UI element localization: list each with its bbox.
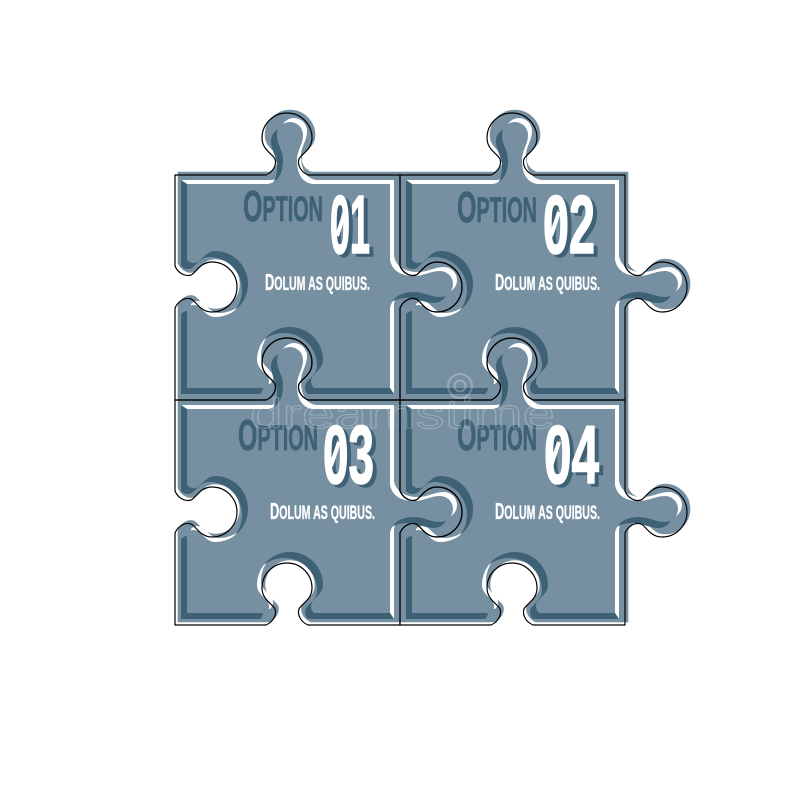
number 04: 04	[544, 408, 599, 501]
watermark word: dreamstime	[250, 390, 555, 437]
text: 01	[334, 181, 374, 274]
option 01 text	[243, 178, 374, 295]
puzzle base fill	[178, 110, 690, 622]
number 04 shadow: 04	[548, 411, 603, 504]
option 04 description: DOLUM AS QUIBUS.	[495, 498, 600, 524]
number 02: 02	[543, 178, 595, 271]
puzzle piece 04 bevel	[406, 343, 682, 619]
number 03: 03	[323, 408, 374, 501]
option 02 description: DOLUM AS QUIBUS.	[495, 269, 600, 295]
black piece outlines	[175, 113, 687, 625]
option 04 text	[457, 408, 603, 524]
watermark spiral	[448, 374, 472, 398]
number 02	[543, 178, 595, 271]
number 04	[544, 408, 599, 501]
option 03 heading: OPTION	[238, 411, 318, 460]
option 03 description: DOLUM AS QUIBUS.	[270, 498, 375, 524]
number 02 shadow: 02	[547, 181, 599, 274]
puzzle piece 03 bevel	[181, 343, 457, 619]
text: 01	[330, 178, 370, 271]
number 03 shadow: 03	[327, 411, 378, 504]
option 01 description: DOLUM AS QUIBUS.	[265, 269, 370, 295]
option 02 heading: OPTION	[457, 183, 537, 232]
puzzle piece 01 bevel	[181, 118, 457, 394]
option 02 text	[457, 178, 600, 295]
option 03 text	[238, 408, 378, 524]
puzzle piece 02 bevel	[406, 118, 682, 394]
option 01 heading: OPTION	[243, 182, 323, 231]
watermark	[250, 374, 555, 437]
option 04 heading: OPTION	[457, 411, 537, 460]
